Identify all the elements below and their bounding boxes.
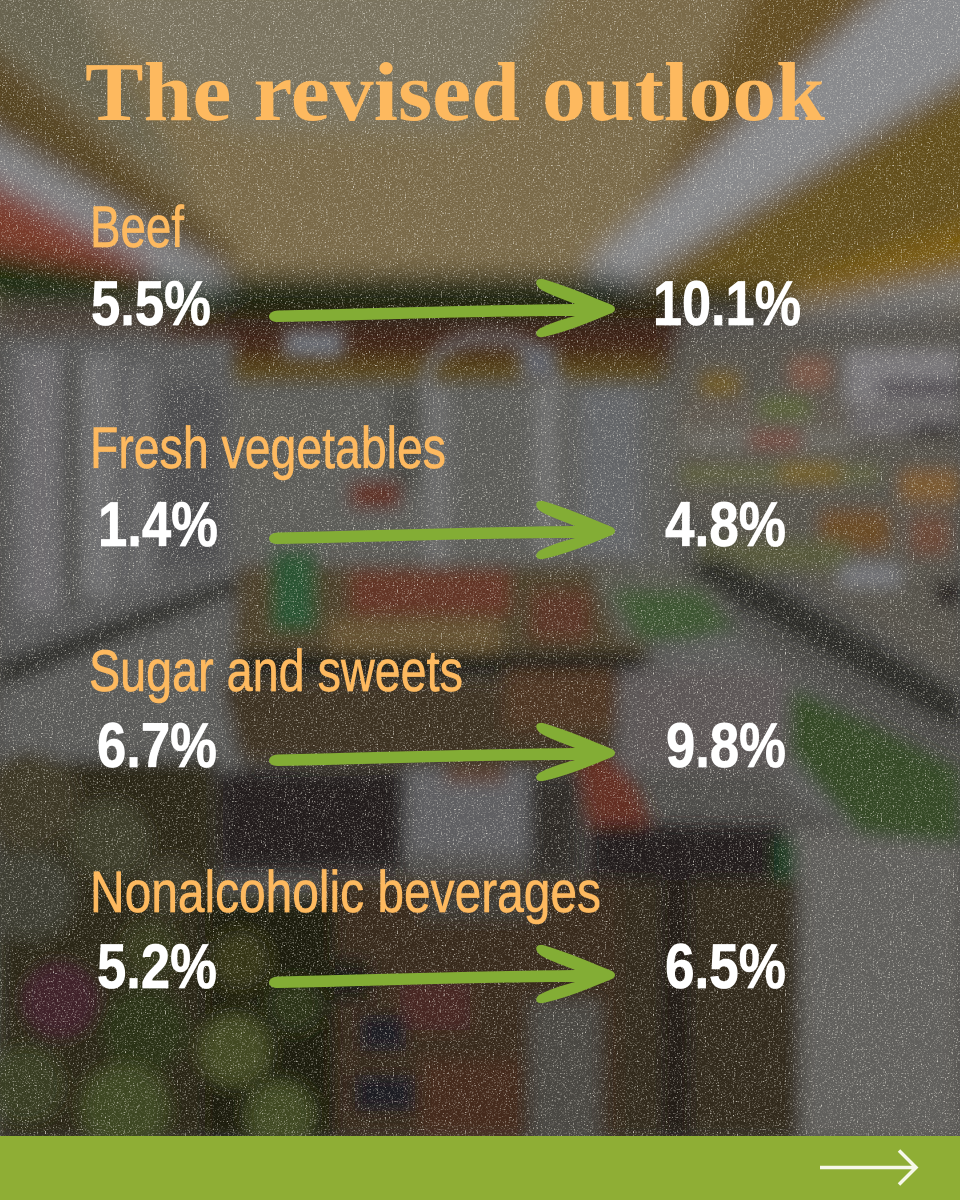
label: nonalcoholic beverages: Nonalcoholic beverages (90, 860, 601, 925)
footer bar (0, 1136, 960, 1200)
label: beef: Beef (90, 195, 185, 260)
value: sugar after: 9.8% (666, 711, 786, 781)
arrow: sugar (269, 723, 615, 781)
floors (0, 590, 240, 780)
row: beef (90, 195, 801, 339)
arrow: beef (269, 279, 615, 337)
value: beverages after: 6.5% (665, 932, 786, 1002)
row: nonalcoholic beverages (90, 860, 786, 1003)
label: fresh vegetables: Fresh vegetables (90, 416, 446, 481)
label: sugar and sweets: Sugar and sweets (89, 639, 463, 704)
value: beverages before: 5.2% (97, 932, 217, 1002)
row: fresh vegetables (90, 416, 786, 560)
value: beef after: 10.1% (653, 269, 801, 339)
icon: next arrow (820, 1150, 916, 1184)
produce table (230, 565, 650, 670)
value: beef before: 5.5% (91, 269, 211, 339)
melons (0, 760, 215, 1140)
arrow: beverages (269, 945, 615, 1003)
left coolers (0, 338, 235, 678)
arrow: vegetables (269, 501, 615, 559)
value: vegetables before: 1.4% (98, 490, 218, 560)
title: The revised outlook (85, 46, 825, 139)
row: sugar and sweets (89, 639, 786, 781)
lower center (320, 880, 640, 1140)
middle coolers (235, 385, 675, 565)
value: sugar before: 6.7% (97, 711, 217, 781)
right shelves (675, 335, 960, 680)
value: vegetables after: 4.8% (665, 490, 786, 560)
cart + basket (220, 680, 620, 770)
